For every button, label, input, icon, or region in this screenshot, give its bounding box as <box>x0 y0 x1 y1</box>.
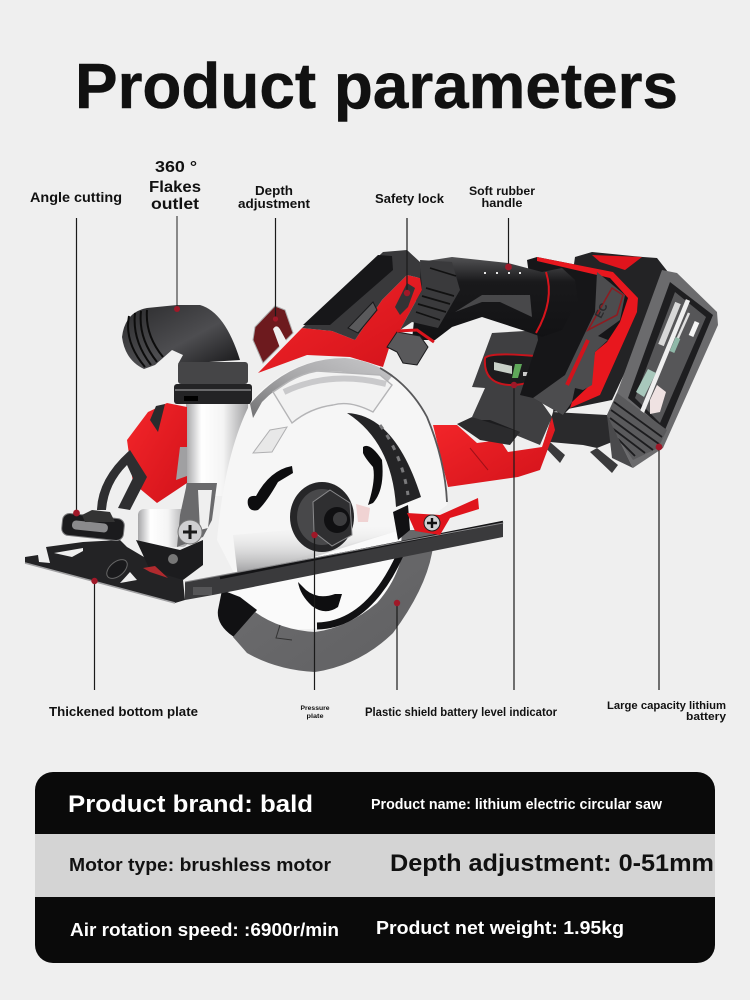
callout: pressure plate: Pressure <box>300 706 330 712</box>
callout: depth adjustment: Depth <box>255 183 293 198</box>
battery pack <box>543 252 718 473</box>
pivot cylinder and screw <box>103 483 217 582</box>
callout: plastic shield <box>394 600 400 690</box>
table background <box>35 772 715 963</box>
title: Product parameters <box>75 50 678 122</box>
callout: soft rubber handle: Soft rubber <box>469 186 536 198</box>
callout: soft rubber handle: handle <box>482 198 522 210</box>
row 2: depth adjustment: Depth adjustment: 0-51mm <box>390 850 714 877</box>
callout: thickened bottom plate: Thickened bottom plate <box>49 704 198 719</box>
callout: battery level indicator: Plastic shield battery level indicator <box>365 707 558 719</box>
callout: safety lock <box>375 191 445 296</box>
left motor housing red <box>127 403 187 503</box>
soft rubber handle <box>412 257 578 340</box>
white exhaust tube <box>186 404 248 496</box>
base plate <box>25 522 503 603</box>
callout: flakes outlet: 360 ° <box>155 159 197 176</box>
EC emblem text: EC <box>593 301 611 320</box>
grey row <box>35 834 715 897</box>
row 1: brand: Product brand: bald <box>68 791 313 818</box>
red depth knob <box>393 498 479 540</box>
parameter table <box>35 772 715 963</box>
callout: pressure plate: plate <box>306 714 324 720</box>
row 3: net weight: Product net weight: 1.95kg <box>376 918 624 938</box>
callout: flakes outlet: Flakes <box>149 179 201 196</box>
callout: depth adjustment <box>238 183 311 322</box>
row 1: product name: Product name: lithium electric circular saw <box>371 797 663 813</box>
angle lever <box>61 510 125 541</box>
callout: safety lock: Safety lock <box>375 191 445 206</box>
callout: flakes outlet <box>149 159 201 312</box>
callout: angle cutting <box>30 189 122 516</box>
row 3: rotation speed: Air rotation speed: :6900r/min <box>70 920 339 940</box>
callout: battery level indicator <box>365 382 558 719</box>
handle column and battery indicator <box>472 330 560 445</box>
callout: pressure plate <box>300 532 330 720</box>
motor housing red right <box>433 417 555 487</box>
callout: flakes outlet: outlet <box>151 196 200 213</box>
row 2: motor type: Motor type: brushless motor <box>69 855 331 875</box>
dust outlet elbow <box>122 305 252 404</box>
saw body and trigger housing <box>258 250 460 373</box>
saw blade and upper guard <box>217 358 447 578</box>
angle scale bracket <box>97 450 147 510</box>
callout: large capacity lithium battery <box>607 444 727 723</box>
depth adjustment bracket <box>253 306 293 363</box>
blade hub and nut <box>290 482 354 552</box>
callout: thickened bottom plate <box>49 578 198 719</box>
callout: angle cutting: Angle cutting <box>30 189 122 205</box>
callout: large capacity lithium battery: battery <box>686 711 727 723</box>
lower blade guard <box>218 530 436 672</box>
callout: soft rubber handle <box>469 186 536 270</box>
callout: large capacity lithium battery: Large capacity lithium <box>607 700 726 712</box>
circular saw illustration <box>25 250 718 672</box>
battery adapter with red frame <box>520 257 638 415</box>
callout: depth adjustment: adjustment <box>238 196 311 211</box>
